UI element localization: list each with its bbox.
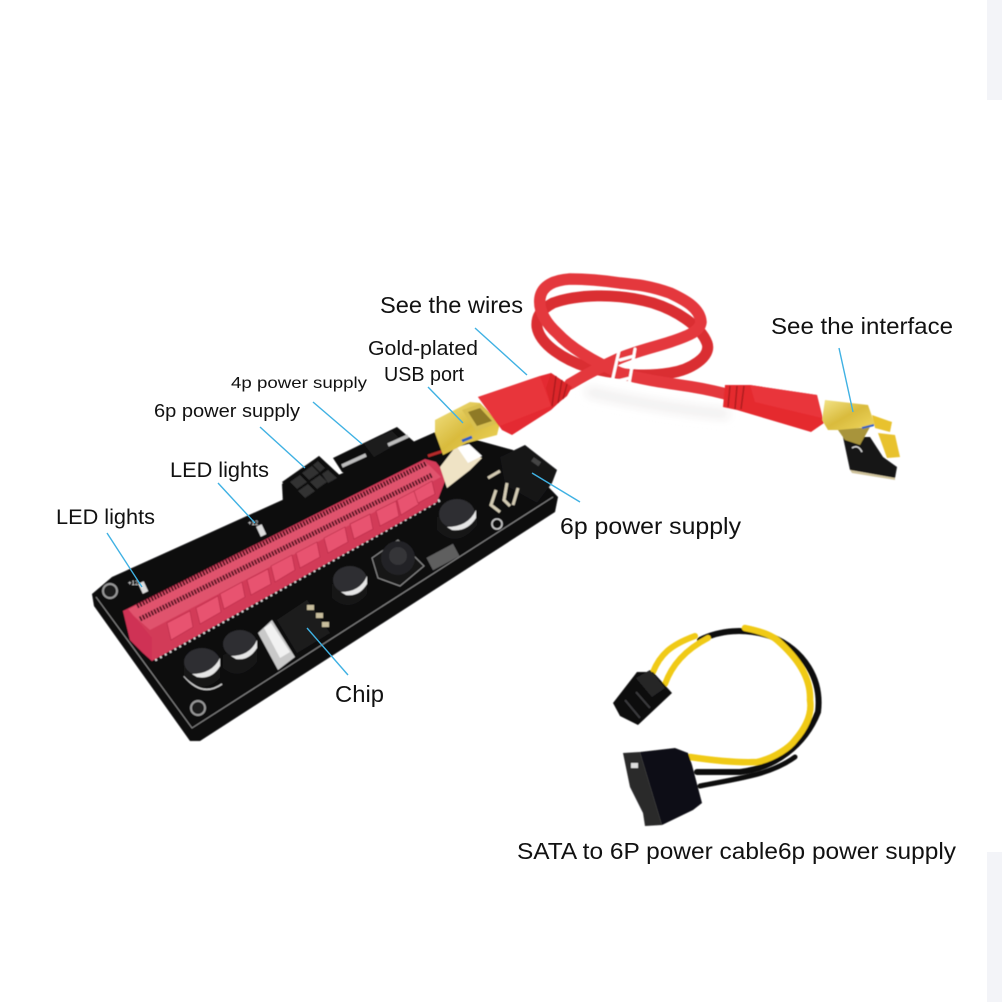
label: See the wires: See the wires — [380, 292, 523, 318]
label: See the interface: See the interface — [771, 313, 953, 339]
wires — [653, 628, 819, 786]
riser board: +12 — [248, 521, 259, 527]
SATA plug — [623, 748, 702, 826]
label: 6p power supply top: 6p power supply — [154, 400, 301, 421]
small IC pads — [426, 544, 460, 570]
slot blocks — [167, 481, 435, 640]
PCB edge trace — [96, 497, 553, 728]
right red USB plug — [723, 385, 824, 432]
component pads row — [155, 500, 440, 660]
white cable tie — [610, 349, 635, 384]
line: gold-plated USB port — [428, 387, 463, 423]
line: see the wires — [475, 328, 527, 375]
PCB — [92, 430, 558, 741]
line: 4p power supply — [313, 402, 362, 444]
label: SATA cable caption: SATA to 6P power cable6p power supply — [517, 838, 957, 864]
gold USB port — [435, 402, 500, 455]
SATA to 6P cable — [613, 628, 819, 826]
line: LED lights lower — [107, 533, 142, 587]
callout lines — [107, 328, 853, 675]
cable shadow — [590, 392, 725, 414]
inductor — [372, 540, 424, 586]
line: 6p power supply top — [260, 427, 305, 468]
back strand — [537, 296, 708, 375]
PCIe x1 adapter card — [822, 400, 900, 480]
right 6-pin socket — [488, 445, 557, 529]
6-pin socket top — [282, 456, 345, 520]
4-pin socket — [333, 427, 418, 482]
PCIe slot — [123, 459, 447, 661]
left red USB plug — [478, 373, 572, 435]
mounting holes — [103, 584, 117, 598]
front strand — [540, 279, 726, 394]
line: see the interface — [839, 348, 853, 412]
chip — [258, 600, 330, 670]
label: LED lights lower: LED lights — [56, 506, 155, 529]
line: 6p power supply right — [532, 473, 580, 502]
label: 4p power supply: 4p power supply — [231, 375, 367, 392]
riser board: +12 — [128, 581, 139, 587]
6-pin plug — [613, 670, 672, 725]
label: 6p power supply right: 6p power supply — [560, 513, 742, 539]
line: chip — [307, 628, 348, 675]
red USB cable — [537, 279, 726, 414]
label: Chip: Chip — [335, 681, 384, 707]
line: LED lights upper — [218, 483, 255, 523]
LED markers — [138, 581, 148, 594]
riser board — [92, 402, 558, 741]
label: Gold-plated: Gold-plated — [368, 338, 478, 360]
white power connector — [428, 444, 482, 488]
capacitors — [184, 499, 477, 689]
label: USB port: USB port — [384, 364, 464, 386]
label: LED lights upper: LED lights — [170, 459, 269, 482]
